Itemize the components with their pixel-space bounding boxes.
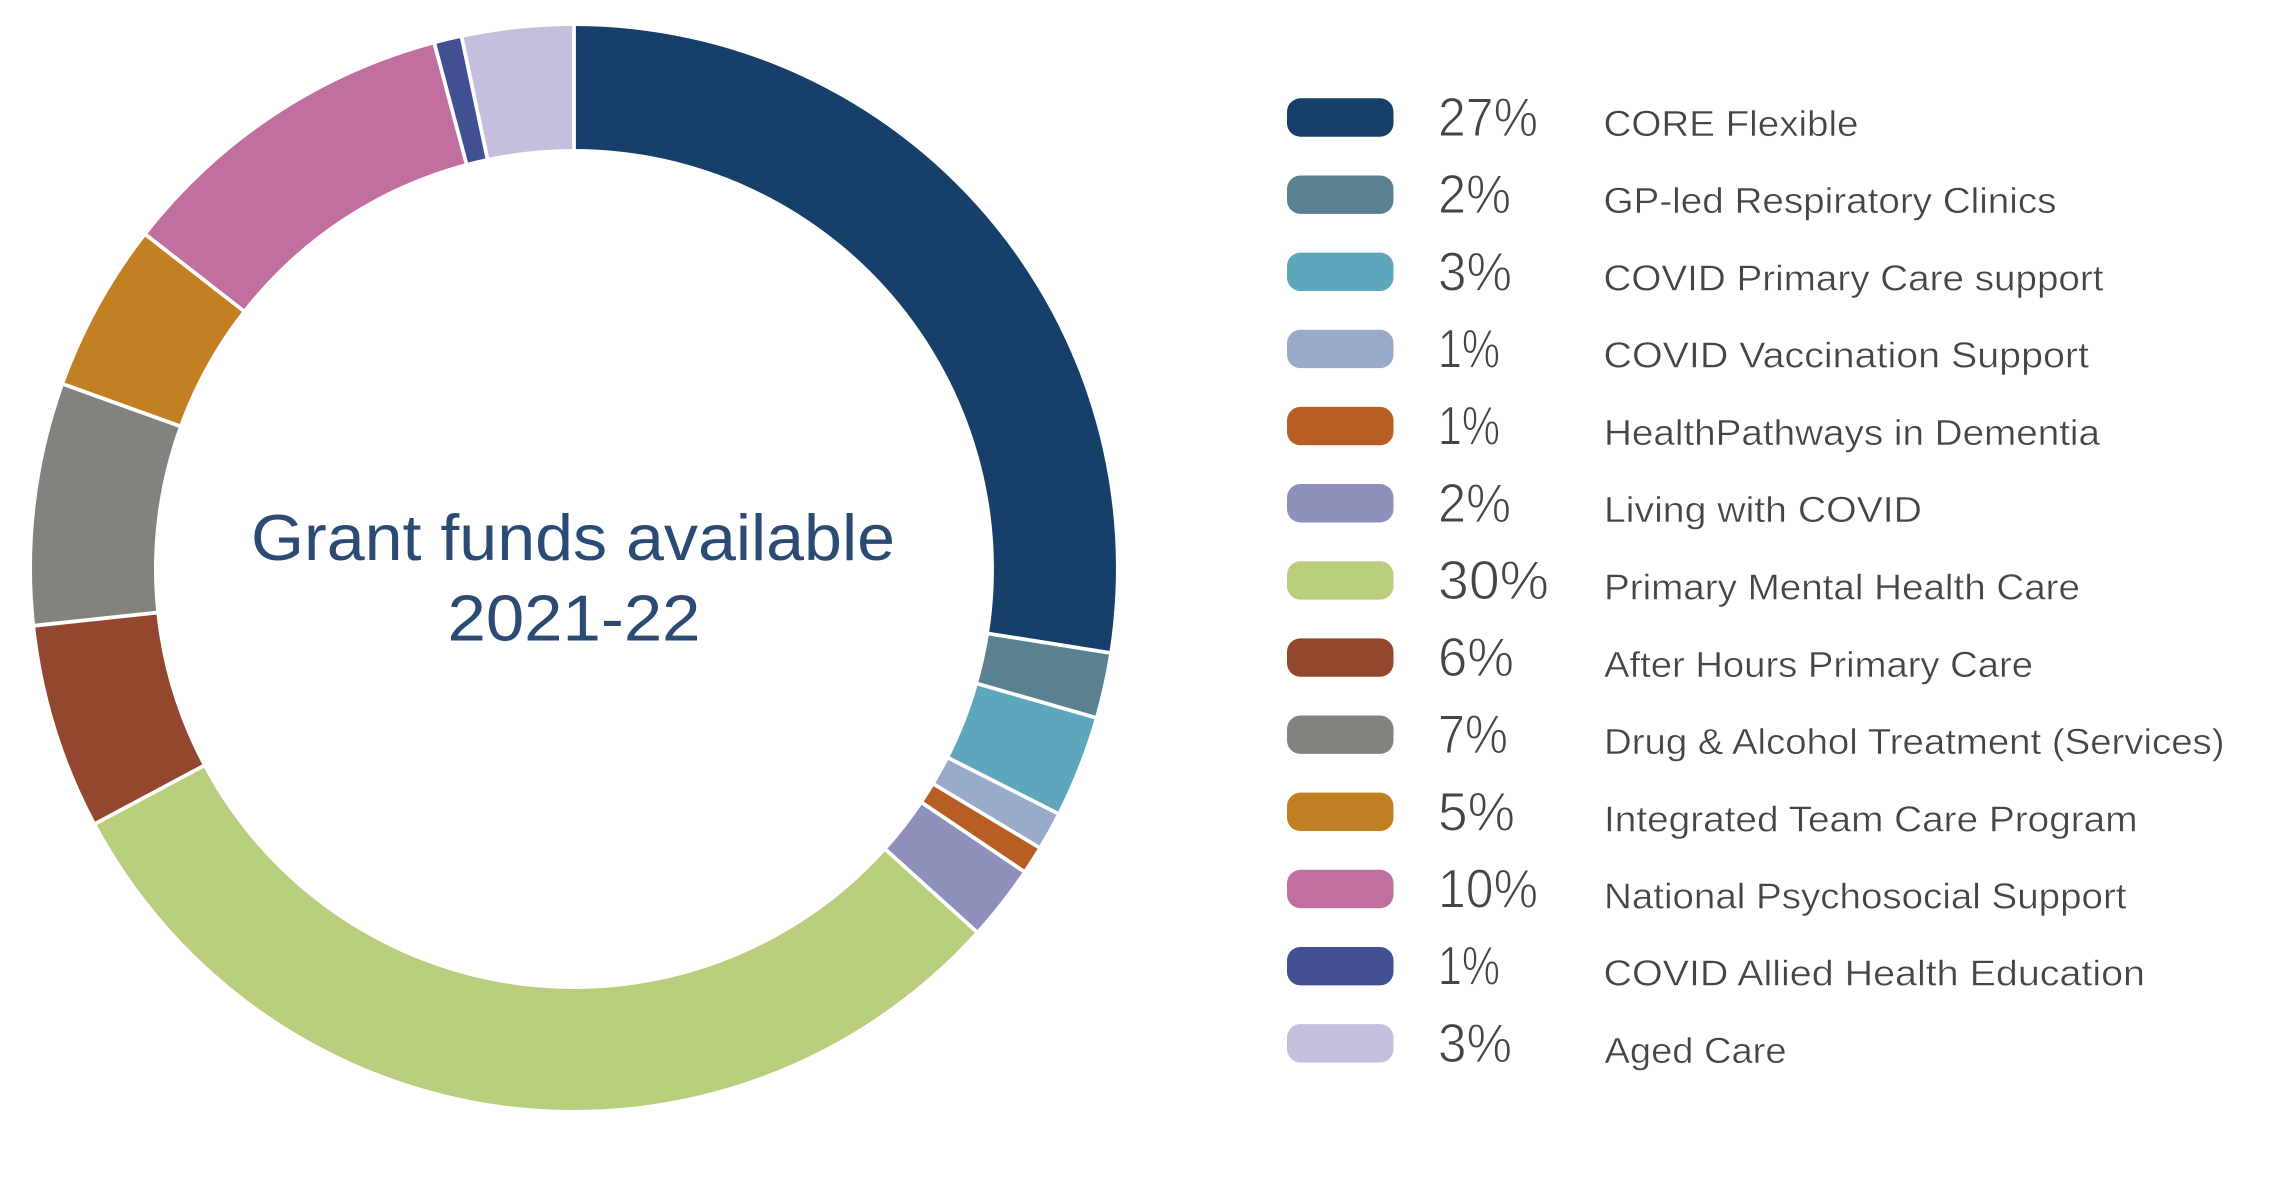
segment: After Hours Primary Care 6% [35,614,203,823]
legend row: COVID Allied Health Education: 1% [1438,935,1500,997]
legend row: CORE Flexible: CORE Flexible [1604,103,1858,144]
legend row: Integrated Team Care Program [1287,780,2138,842]
legend row: COVID Primary Care support: COVID Primary Care support [1604,257,2104,298]
segment: Drug & Alcohol Treatment (Services) 7% [32,384,179,626]
legend row: COVID Allied Health Education: COVID Allied Health Education [1604,953,2145,994]
legend row: Living with COVID [1287,472,1922,534]
legend row: Aged Care: Aged Care [1604,1030,1786,1071]
centre title: 2021-22 [448,582,700,655]
legend row: CORE Flexible: 27% [1438,86,1538,148]
segment: COVID Primary Care support 3% [949,685,1095,813]
legend row: Primary Mental Health Care: Primary Mental Health Care [1604,566,2080,608]
legend row: Drug & Alcohol Treatment (Services): Drug & Alcohol Treatment (Services) [1604,721,2224,762]
legend row: Integrated Team Care Program: Integrated Team Care Program [1604,798,2138,839]
legend row: Living with COVID: 2% [1438,472,1511,534]
segment: Integrated Team Care Program 5% [64,235,243,427]
centre title [251,501,895,655]
centre title: Grant funds available [251,501,895,574]
segment: COVID Allied Health Education 1% [435,38,487,163]
segment: GP-led Respiratory Clinics 2% [978,635,1109,717]
legend row: COVID Vaccination Support: 1% [1438,317,1500,379]
legend row: Drug & Alcohol Treatment (Services): 7% [1438,703,1508,765]
legend row: Living with COVID: Living with COVID [1604,489,1922,530]
legend row: Integrated Team Care Program: 5% [1438,780,1515,842]
legend row: CORE Flexible [1287,86,1858,148]
legend row: Primary Mental Health Care [1287,549,2080,611]
legend [1287,86,2224,1074]
segment: COVID Vaccination Support 1% [934,759,1057,847]
legend row: After Hours Primary Care: After Hours Primary Care [1604,644,2033,685]
donut chart [32,26,1116,1110]
legend row: Aged Care [1287,1012,1786,1074]
segment: Aged Care 3% [462,26,574,158]
legend row: Primary Mental Health Care: 30% [1438,549,1549,611]
legend row: National Psychosocial Support: National Psychosocial Support [1604,876,2126,916]
legend row: COVID Primary Care support [1287,240,2104,302]
legend row: COVID Allied Health Education [1287,935,2145,997]
segment: National Psychosocial Support 10% [146,44,466,311]
segment: HealthPathways in Dementia 1% [922,785,1039,871]
legend row: After Hours Primary Care [1287,626,2033,688]
legend row: COVID Vaccination Support: COVID Vaccination Support [1604,335,2089,376]
legend row: HealthPathways in Dementia: 1% [1438,395,1500,457]
segment: Living with COVID 2% [886,804,1023,931]
legend row: HealthPathways in Dementia [1287,395,2101,457]
legend row: GP-led Respiratory Clinics [1287,163,2056,225]
legend row: Drug & Alcohol Treatment (Services) [1287,703,2224,765]
legend row: COVID Primary Care support: 3% [1438,240,1512,302]
legend row: HealthPathways in Dementia: HealthPathways in Dementia [1604,412,2101,453]
legend row: GP-led Respiratory Clinics: 2% [1438,163,1511,225]
legend row: Aged Care: 3% [1438,1012,1512,1074]
segment: Primary Mental Health Care 30% [96,767,976,1110]
legend row: National Psychosocial Support [1287,858,2126,920]
legend row: COVID Vaccination Support [1287,317,2089,379]
legend row: National Psychosocial Support: 10% [1438,858,1538,920]
segment: CORE Flexible 27% [574,26,1116,653]
legend row: After Hours Primary Care: 6% [1438,626,1514,688]
legend row: GP-led Respiratory Clinics: GP-led Respiratory Clinics [1604,180,2056,221]
